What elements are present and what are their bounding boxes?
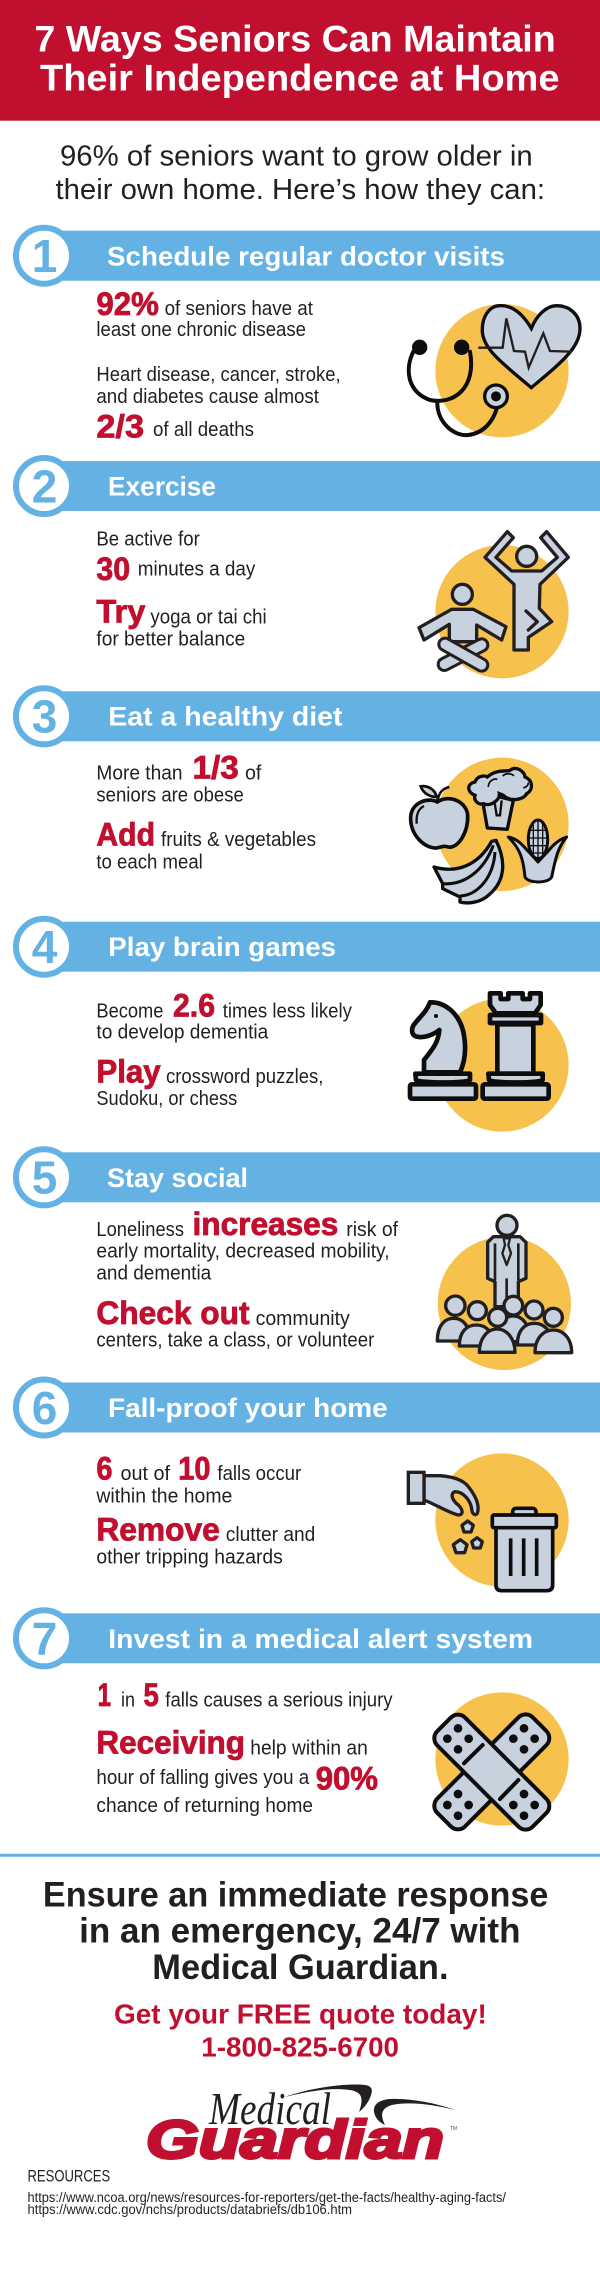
heading bar 5 [16, 1149, 600, 1205]
icon: broccoli [469, 769, 531, 829]
title: 7 Ways Seniors Can Maintain [34, 19, 556, 60]
heading bar 1: 1 [32, 230, 57, 282]
logo: Medical Guardian: Medical [208, 2083, 331, 2134]
heading bar 6: Fall-proof your home [108, 1393, 388, 1423]
heading bar 3 [16, 688, 600, 744]
step 7 text: 90% [316, 1760, 378, 1796]
title: Their Independence at Home [40, 58, 560, 99]
step 6 text: other tripping hazards [96, 1546, 283, 1568]
step 4 text [96, 988, 352, 1110]
heading bar 7: 7 [32, 1612, 57, 1664]
closing statement: Ensure an immediate response [43, 1876, 548, 1915]
resources: RESOURCES [28, 2167, 110, 2186]
step 2 text: Try [96, 593, 146, 629]
step 5 text: and dementia [96, 1262, 212, 1284]
step 2 text: minutes a day [138, 559, 255, 581]
icon: knight [410, 1002, 476, 1099]
step 7 text: Receiving [96, 1724, 245, 1760]
step 5 text: community [256, 1308, 350, 1330]
step 6 text: within the home [95, 1485, 232, 1507]
icon: stethoscope and heart [409, 304, 580, 437]
step 1 text: of seniors have at [165, 298, 313, 320]
step 1 text: 2/3 [96, 409, 144, 445]
closing statement: in an emergency, 24/7 with [79, 1912, 520, 1951]
step 3 text [96, 749, 316, 873]
call to action [114, 1998, 487, 2062]
step 7 text: falls causes a serious injury [165, 1690, 393, 1712]
step 4 text: to develop dementia [96, 1021, 269, 1043]
step 2 text: Be active for [96, 529, 200, 551]
icon: trash can [492, 1508, 556, 1591]
heading bar 4 [16, 919, 600, 975]
heading bar 5: Stay social [107, 1163, 248, 1193]
step 3 text: 1/3 [192, 749, 239, 785]
step 6 text: out of [120, 1463, 170, 1485]
resources: https://www.cdc.gov/nchs/products/databriefs/db106.htm [28, 2202, 352, 2217]
step 4 text: 2.6 [173, 988, 215, 1024]
step 1 text: 92% [96, 286, 159, 322]
heading bar 7: Invest in a medical alert system [108, 1624, 533, 1654]
intro text: 96% of seniors want to grow older in [60, 141, 533, 173]
step 4 text: crossword puzzles, [166, 1066, 323, 1088]
step 2 text: 30 [96, 551, 130, 587]
step 4 text: Play [96, 1054, 161, 1090]
icon: debris [453, 1521, 482, 1553]
heading bar 6 [16, 1380, 600, 1436]
heading bar 3: 3 [32, 690, 57, 742]
icon: speaker and audience [437, 1215, 572, 1370]
step 1 text: least one chronic disease [96, 319, 306, 341]
step 5 text: risk of [346, 1219, 398, 1241]
icon: hand and trash can [408, 1453, 569, 1591]
call to action: Get your FREE quote today! [114, 1998, 487, 2029]
icon: corn [508, 820, 567, 882]
heading bar 3: Eat a healthy diet [108, 702, 342, 732]
step 6 text: 10 [178, 1450, 210, 1486]
icon: yoga figures [419, 532, 569, 678]
icon: crossed bandages [430, 1692, 569, 1834]
step 3 text: seniors are obese [96, 784, 244, 806]
step 3 text: fruits & vegetables [161, 829, 316, 851]
panel: step 4 play brain games [16, 919, 600, 1132]
panel: step 3 eat a healthy diet [16, 688, 600, 903]
heading bar 4: 4 [32, 921, 58, 973]
logo: Medical Guardian [146, 2083, 457, 2170]
step 6 text: clutter and [226, 1524, 315, 1546]
icon: chess pieces [410, 993, 569, 1132]
step 4 text: Sudoku, or chess [96, 1088, 237, 1110]
icon: apple [411, 786, 468, 848]
step 4 text: times less likely [223, 1000, 352, 1022]
step 1 text [96, 286, 341, 445]
step 7 text: hour of falling gives you a [96, 1767, 310, 1789]
heading bar 2: Exercise [108, 471, 216, 501]
step 5 text [96, 1206, 398, 1351]
call to action: 1-800-825-6700 [201, 2031, 399, 2062]
step 3 text: of [245, 762, 262, 784]
step 7 text: 1 [98, 1677, 111, 1713]
panel: step 7 invest in a medical alert system [16, 1610, 600, 1834]
step 1 text: and diabetes cause almost [96, 386, 319, 408]
step 1 text: Heart disease, cancer, stroke, [96, 364, 341, 386]
step 5 text: increases [192, 1206, 338, 1242]
panel: step 5 stay social [16, 1149, 600, 1370]
closing statement: Medical Guardian. [152, 1948, 449, 1987]
resources: https://www.ncoa.org/news/resources-for-reporters/get-the-facts/healthy-aging-facts/ [28, 2190, 506, 2205]
icon: hand [408, 1472, 478, 1515]
icon: rook [483, 993, 549, 1099]
heading bar 2 [16, 458, 600, 514]
step 7 text: chance of returning home [96, 1795, 313, 1817]
heading bar 1: Schedule regular doctor visits [107, 241, 505, 271]
panel: step 2 exercise [16, 458, 600, 678]
step 3 text: More than [96, 762, 182, 784]
icon: fruits and vegetables [411, 758, 569, 903]
step 7 text: help within an [250, 1737, 368, 1759]
closing statement [43, 1876, 548, 1987]
step 6 text: Remove [96, 1511, 220, 1547]
heading bar 2: 2 [32, 460, 57, 512]
step 3 text: Add [96, 817, 155, 853]
step 3 text: to each meal [96, 851, 203, 873]
panel: step 6 fall-proof your home [16, 1380, 600, 1591]
step 7 text: in [121, 1690, 135, 1712]
step 1 text: of all deaths [153, 419, 254, 441]
step 7 text [96, 1677, 393, 1817]
step 6 text [95, 1450, 315, 1568]
logo: Medical Guardian: Guardian [146, 2110, 444, 2170]
step 6 text: falls occur [217, 1463, 302, 1485]
heading bar 7 [16, 1610, 600, 1666]
step 5 text: Loneliness [96, 1219, 184, 1241]
intro text: their own home. Here’s how they can: [56, 174, 545, 206]
intro text [56, 141, 545, 206]
title [34, 19, 559, 99]
step 6 text: 6 [96, 1450, 112, 1486]
heading bar 5: 5 [32, 1152, 57, 1204]
step 2 text: for better balance [96, 628, 245, 650]
step 5 text: early mortality, decreased mobility, [96, 1240, 390, 1262]
resources [28, 2167, 506, 2217]
step 5 text: Check out [96, 1295, 250, 1331]
step 5 text: centers, take a class, or volunteer [96, 1329, 375, 1351]
heading bar 4: Play brain games [108, 932, 336, 962]
logo: Medical Guardian: TM [450, 2126, 457, 2132]
step 2 text [96, 529, 267, 650]
panel: step 1 schedule regular doctor visits [16, 228, 600, 445]
step 7 text: 5 [144, 1677, 159, 1713]
step 2 text: yoga or tai chi [150, 607, 267, 629]
header banner [0, 0, 600, 121]
heading bar 6: 6 [32, 1382, 57, 1434]
heading bar 1 [16, 228, 600, 284]
icon: bananas [434, 840, 503, 903]
step 4 text: Become [96, 1000, 163, 1022]
